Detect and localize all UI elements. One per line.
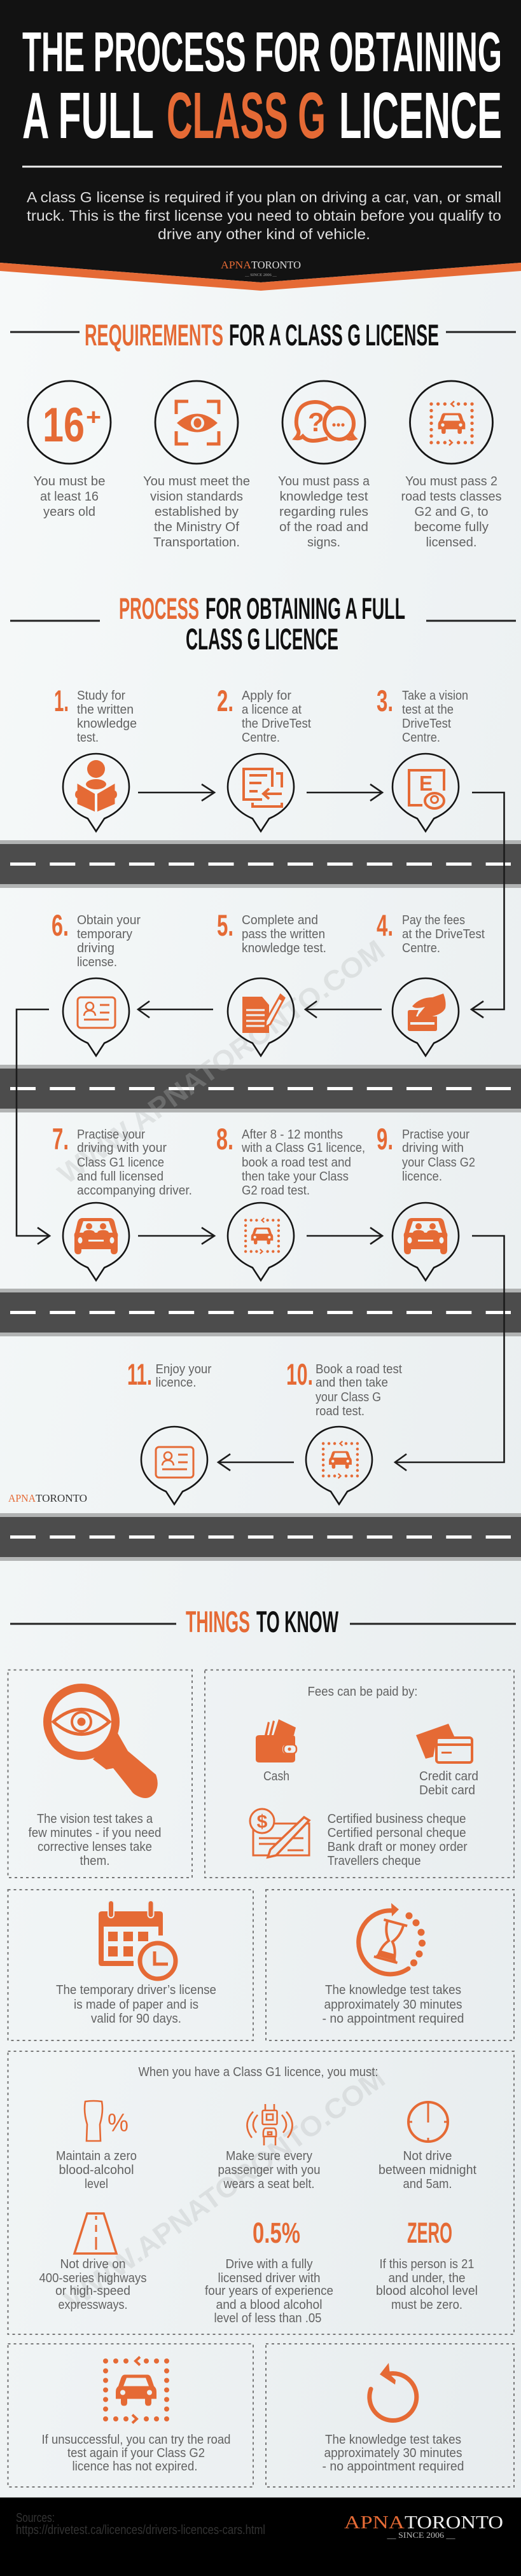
road 1	[0, 840, 521, 888]
heading: requirements: REQUIREMENTS	[85, 318, 223, 352]
panel: fees: Fees can be paid by:	[308, 1685, 417, 1699]
rule: night driving	[379, 2149, 476, 2191]
step 6	[52, 908, 141, 1056]
step 10	[286, 1357, 402, 1504]
rule: seat belt: passenger with you	[218, 2163, 321, 2177]
intro text: truck. This is the first license you need to obtain before you qualify to	[27, 207, 501, 224]
requirement: road tests: road tests classes	[401, 490, 501, 504]
icon: beer glass percent: %	[108, 2109, 129, 2137]
requirement: knowledge test: signs.	[307, 536, 340, 550]
header logo: TORONTO	[251, 259, 301, 271]
panel: retry road test: licence has not expired.	[73, 2460, 197, 2474]
panel: fees	[205, 1670, 514, 1878]
icon: vision chart	[409, 770, 444, 808]
step 10: Book a road test	[316, 1362, 402, 1376]
step 2: 2.	[217, 684, 233, 717]
intro text	[27, 189, 501, 242]
step 1: Study for	[77, 689, 125, 703]
rule: highways	[39, 2257, 146, 2312]
step 3: DriveTest	[402, 717, 451, 731]
icon: 16+: 16	[43, 398, 85, 452]
step 6: license.	[77, 955, 117, 969]
panel: retry road test	[8, 2344, 253, 2487]
panel: fees: Certified personal cheque	[328, 1826, 466, 1840]
step 9: 9.	[377, 1122, 393, 1156]
rule: night driving: Not drive	[403, 2149, 452, 2163]
step 3: test at the	[402, 703, 454, 717]
panel: vision test	[8, 1670, 192, 1878]
rule: accompanying driver: licensed driver with	[218, 2271, 321, 2285]
panel: vision test: them.	[80, 1854, 109, 1868]
rule: blood alcohol	[56, 2149, 137, 2191]
rule: blood alcohol: blood-alcohol	[59, 2163, 134, 2177]
connector arrows	[17, 784, 504, 1471]
step 4	[377, 908, 485, 1056]
rule: accompanying driver: four years of experience	[205, 2284, 333, 2298]
icon: car with passengers	[404, 1218, 447, 1254]
header logo: __ SINCE 2006 __	[244, 273, 277, 277]
step 7: accompanying driver.	[77, 1184, 192, 1198]
step 2: the DriveTest	[242, 717, 311, 731]
step 8: 8.	[216, 1122, 233, 1156]
requirement: road tests: become fully	[414, 520, 489, 534]
icon: magnifier with eye	[47, 1688, 158, 1798]
icon: replay arrow	[370, 2363, 417, 2421]
rule: night driving: and 5am.	[403, 2177, 452, 2191]
requirement: age: years old	[43, 505, 95, 519]
step 4: Pay the fees	[402, 913, 465, 927]
icon: cheque: $	[257, 1811, 268, 1832]
icon: licence card	[156, 1447, 193, 1478]
header logo	[221, 259, 301, 277]
panel: fees: Debit card	[419, 1783, 475, 1797]
icon: 16+: +	[86, 404, 101, 430]
step 7: Practise your	[77, 1128, 145, 1142]
rule: highways: expressways.	[59, 2298, 127, 2312]
panel: knowledge test time: approximately 30 minutes	[324, 1998, 462, 2012]
step 1: test.	[77, 731, 99, 745]
rule: seat belt: wears a seat belt.	[223, 2177, 314, 2191]
icon: road test	[103, 2357, 169, 2423]
title: CLASS G	[167, 79, 326, 152]
requirement: knowledge test: knowledge test	[280, 490, 368, 504]
step 5: knowledge test.	[242, 941, 326, 955]
title: A FULL	[22, 79, 154, 152]
step 7	[52, 1122, 192, 1280]
heading: requirements	[10, 318, 516, 352]
title	[22, 20, 502, 152]
rule: accompanying driver: and a blood alcohol	[216, 2298, 322, 2312]
step 9: your Class G2	[402, 1156, 475, 1170]
requirement: age: You must be	[33, 474, 106, 488]
step 6: driving	[77, 941, 115, 955]
requirement: road tests: licensed.	[426, 536, 477, 550]
panel: knowledge test retry	[266, 2344, 514, 2487]
footer	[0, 2497, 521, 2576]
figure: zero: ZERO	[407, 2217, 452, 2249]
requirement: knowledge test: You must pass a	[278, 474, 370, 488]
heading: things to know: TO KNOW	[256, 1605, 338, 1638]
mid logo: TORONTO	[36, 1492, 87, 1504]
step 5: pass the written	[242, 927, 325, 941]
header banner	[0, 0, 521, 291]
step 9: driving with	[402, 1141, 464, 1155]
panel: vision test: few minutes - if you need	[28, 1826, 162, 1840]
panel: retry road test: If unsuccessful, you can try the road	[42, 2433, 230, 2447]
step 7: 7.	[52, 1122, 69, 1156]
step 5: Complete and	[242, 913, 318, 927]
step 8: book a road test and	[242, 1156, 351, 1170]
footer logo: APNA	[344, 2513, 405, 2533]
step 11	[127, 1357, 212, 1504]
icon: person reading	[75, 760, 117, 812]
step 11: Enjoy your	[155, 1362, 212, 1376]
rule: under 21: If this person is 21	[379, 2257, 475, 2271]
panel: fees: Travellers cheque	[328, 1854, 421, 1868]
step 1	[54, 684, 137, 831]
step 10: 10.	[286, 1357, 313, 1391]
step 2: a licence at	[242, 703, 302, 717]
rule: blood alcohol: Maintain a zero	[56, 2149, 137, 2163]
step 4: 4.	[377, 908, 393, 942]
icon: wallet	[256, 1719, 296, 1762]
step 9: Practise your	[402, 1128, 469, 1142]
sources: https://drivetest.ca/licences/drivers-licences-cars.html	[16, 2523, 265, 2537]
icon: seat belt	[247, 2104, 293, 2145]
icon: road test	[322, 1441, 359, 1478]
requirement: vision: vision standards	[150, 490, 243, 504]
rule: highways: Not drive on	[60, 2257, 126, 2271]
icon: application form	[244, 769, 282, 807]
icon: hand paying with card	[408, 994, 446, 1031]
icon: clock	[408, 2102, 448, 2142]
rule: highways: or high-speed	[55, 2284, 130, 2298]
step 3: Take a vision	[402, 689, 468, 703]
step 3	[377, 684, 468, 831]
icon: beer glass percent	[85, 2101, 129, 2141]
icon: highway	[74, 2213, 116, 2254]
icon: road test	[244, 1218, 280, 1254]
panel: knowledge test retry: - no appointment required	[322, 2460, 464, 2474]
step 2: Centre.	[242, 731, 280, 745]
requirement: age: at least 16	[40, 490, 99, 504]
panel: fees: Credit card	[419, 1769, 478, 1783]
step 4: Centre.	[402, 941, 440, 955]
step 7: driving with your	[77, 1141, 167, 1155]
step 5: 5.	[217, 908, 233, 942]
requirement: vision: the Ministry Of	[154, 520, 239, 534]
panel: temporary licence: The temporary driver’s license	[56, 1983, 216, 1997]
icon: hourglass timer	[359, 1903, 426, 1974]
requirement: age	[28, 381, 111, 519]
requirement: vision: Transportation.	[153, 536, 240, 550]
watermark: WWW.APNATORONTO.COM	[52, 934, 391, 1190]
rule: under 21	[376, 2257, 478, 2312]
icon: road test	[429, 401, 474, 445]
panel: fees: Certified business cheque	[328, 1812, 466, 1826]
icon: licence card	[78, 997, 115, 1028]
road 2	[0, 1065, 521, 1112]
requirement: vision: established by	[155, 505, 239, 519]
requirement: road tests: You must pass 2	[405, 474, 497, 488]
heading: things to know: THINGS	[186, 1605, 250, 1638]
icon: car with passengers	[74, 1218, 118, 1254]
panel: class G1 rules: When you have a Class G1 licence, you must:	[139, 2065, 378, 2079]
step 7: and full licensed	[77, 1170, 163, 1184]
step 11: 11.	[127, 1357, 152, 1391]
requirement: knowledge test: of the road and	[279, 520, 368, 534]
heading: process: PROCESS	[119, 592, 199, 625]
rule: accompanying driver: Drive with a fully	[225, 2257, 313, 2271]
rule: under 21: blood alcohol level	[376, 2284, 478, 2298]
step 8: G2 road test.	[242, 1184, 310, 1198]
rule: under 21: must be zero.	[391, 2298, 462, 2312]
panel: retry road test: test again if your Class G2	[67, 2446, 205, 2460]
icon: cards	[416, 1724, 472, 1762]
panel: class G1 rules	[8, 2051, 514, 2334]
panel: knowledge test retry: approximately 30 minutes	[324, 2446, 462, 2460]
step 9	[377, 1122, 475, 1280]
footer logo: __ SINCE 2006 __	[386, 2530, 455, 2540]
sources: Sources:	[16, 2511, 55, 2525]
step 10: and then take	[316, 1376, 388, 1390]
step 8: then take your Class	[242, 1170, 349, 1184]
step 1: 1.	[54, 684, 69, 717]
requirement: vision	[143, 381, 250, 550]
panel: knowledge test retry: The knowledge test takes	[325, 2433, 461, 2447]
panel: fees: Cash	[263, 1769, 289, 1783]
mid logo	[8, 1492, 87, 1504]
step 8: with a Class G1 licence,	[241, 1141, 365, 1155]
heading: process	[10, 592, 516, 656]
watermark: WWW.APNATORONTO.COM	[59, 2063, 391, 2316]
footer logo	[344, 2513, 503, 2540]
rule: night driving: between midnight	[379, 2163, 476, 2177]
rule: accompanying driver: level of less than .05	[214, 2311, 322, 2325]
heading: things to know	[10, 1605, 516, 1638]
icon: cheque	[250, 1809, 309, 1857]
rule: blood alcohol: level	[85, 2177, 108, 2191]
rule: highways: 400-series highways	[39, 2271, 146, 2285]
step 1: the written	[77, 703, 134, 717]
step 11: licence.	[155, 1376, 196, 1390]
requirement: vision: You must meet the	[143, 474, 250, 488]
rule: accompanying driver	[205, 2257, 333, 2325]
icon: speech bubbles: ?	[308, 407, 324, 437]
icon: eye in focus brackets	[176, 401, 219, 444]
panel: knowledge test time: - no appointment required	[322, 2012, 464, 2026]
step 1: knowledge	[77, 717, 137, 731]
panel: knowledge test time	[266, 1890, 514, 2040]
sources	[16, 2511, 265, 2537]
requirement: road tests	[401, 381, 501, 550]
requirement: knowledge test	[278, 381, 370, 550]
step 2	[217, 684, 311, 831]
step 4: at the DriveTest	[402, 927, 485, 941]
step 6: temporary	[77, 927, 132, 941]
heading: process: CLASS G LICENCE	[186, 622, 338, 656]
panel: temporary licence: is made of paper and is	[74, 1998, 198, 2012]
requirement: knowledge test: regarding rules	[279, 505, 368, 519]
step 6: 6.	[52, 908, 69, 942]
panel: vision test: The vision test takes a	[37, 1812, 153, 1826]
icon: calendar and clock	[99, 1901, 176, 1979]
road 3	[0, 1289, 521, 1336]
road 4	[0, 1513, 521, 1561]
panel: fees: Bank draft or money order	[328, 1840, 468, 1854]
intro text: drive any other kind of vehicle.	[158, 226, 370, 242]
rule: under 21: and under, the	[388, 2271, 466, 2285]
icon: speech bubbles	[296, 402, 354, 441]
requirement: road tests: G2 and G, to	[415, 505, 489, 519]
rule: seat belt	[218, 2149, 321, 2191]
panel: knowledge test time: The knowledge test takes	[325, 1983, 461, 1997]
intro text: A class G license is required if you plan on driving a car, van, or small	[27, 189, 501, 205]
header logo: APNA	[221, 259, 252, 271]
step 5	[217, 908, 326, 1056]
step 10: your Class G	[316, 1390, 381, 1404]
step 6: Obtain your	[77, 913, 141, 927]
step 7: Class G1 licence	[77, 1156, 164, 1170]
step 10: road test.	[316, 1404, 365, 1418]
figure: 0.5%: 0.5%	[253, 2217, 300, 2249]
step 8: After 8 - 12 months	[242, 1128, 343, 1142]
panel: temporary licence	[8, 1890, 253, 2040]
step 2: Apply for	[242, 689, 291, 703]
icon: vision chart: E	[419, 772, 433, 795]
icon: document and pencil	[242, 995, 284, 1033]
step 3: 3.	[377, 684, 393, 717]
step 8	[216, 1122, 365, 1280]
panel: vision test: corrective lenses take	[38, 1840, 152, 1854]
rule: seat belt: Make sure every	[226, 2149, 312, 2163]
step 9: licence.	[402, 1170, 442, 1184]
footer logo: TORONTO	[405, 2513, 503, 2533]
panel: temporary licence: valid for 90 days.	[91, 2012, 181, 2026]
mid logo: APNA	[8, 1492, 36, 1504]
step 3: Centre.	[402, 731, 440, 745]
